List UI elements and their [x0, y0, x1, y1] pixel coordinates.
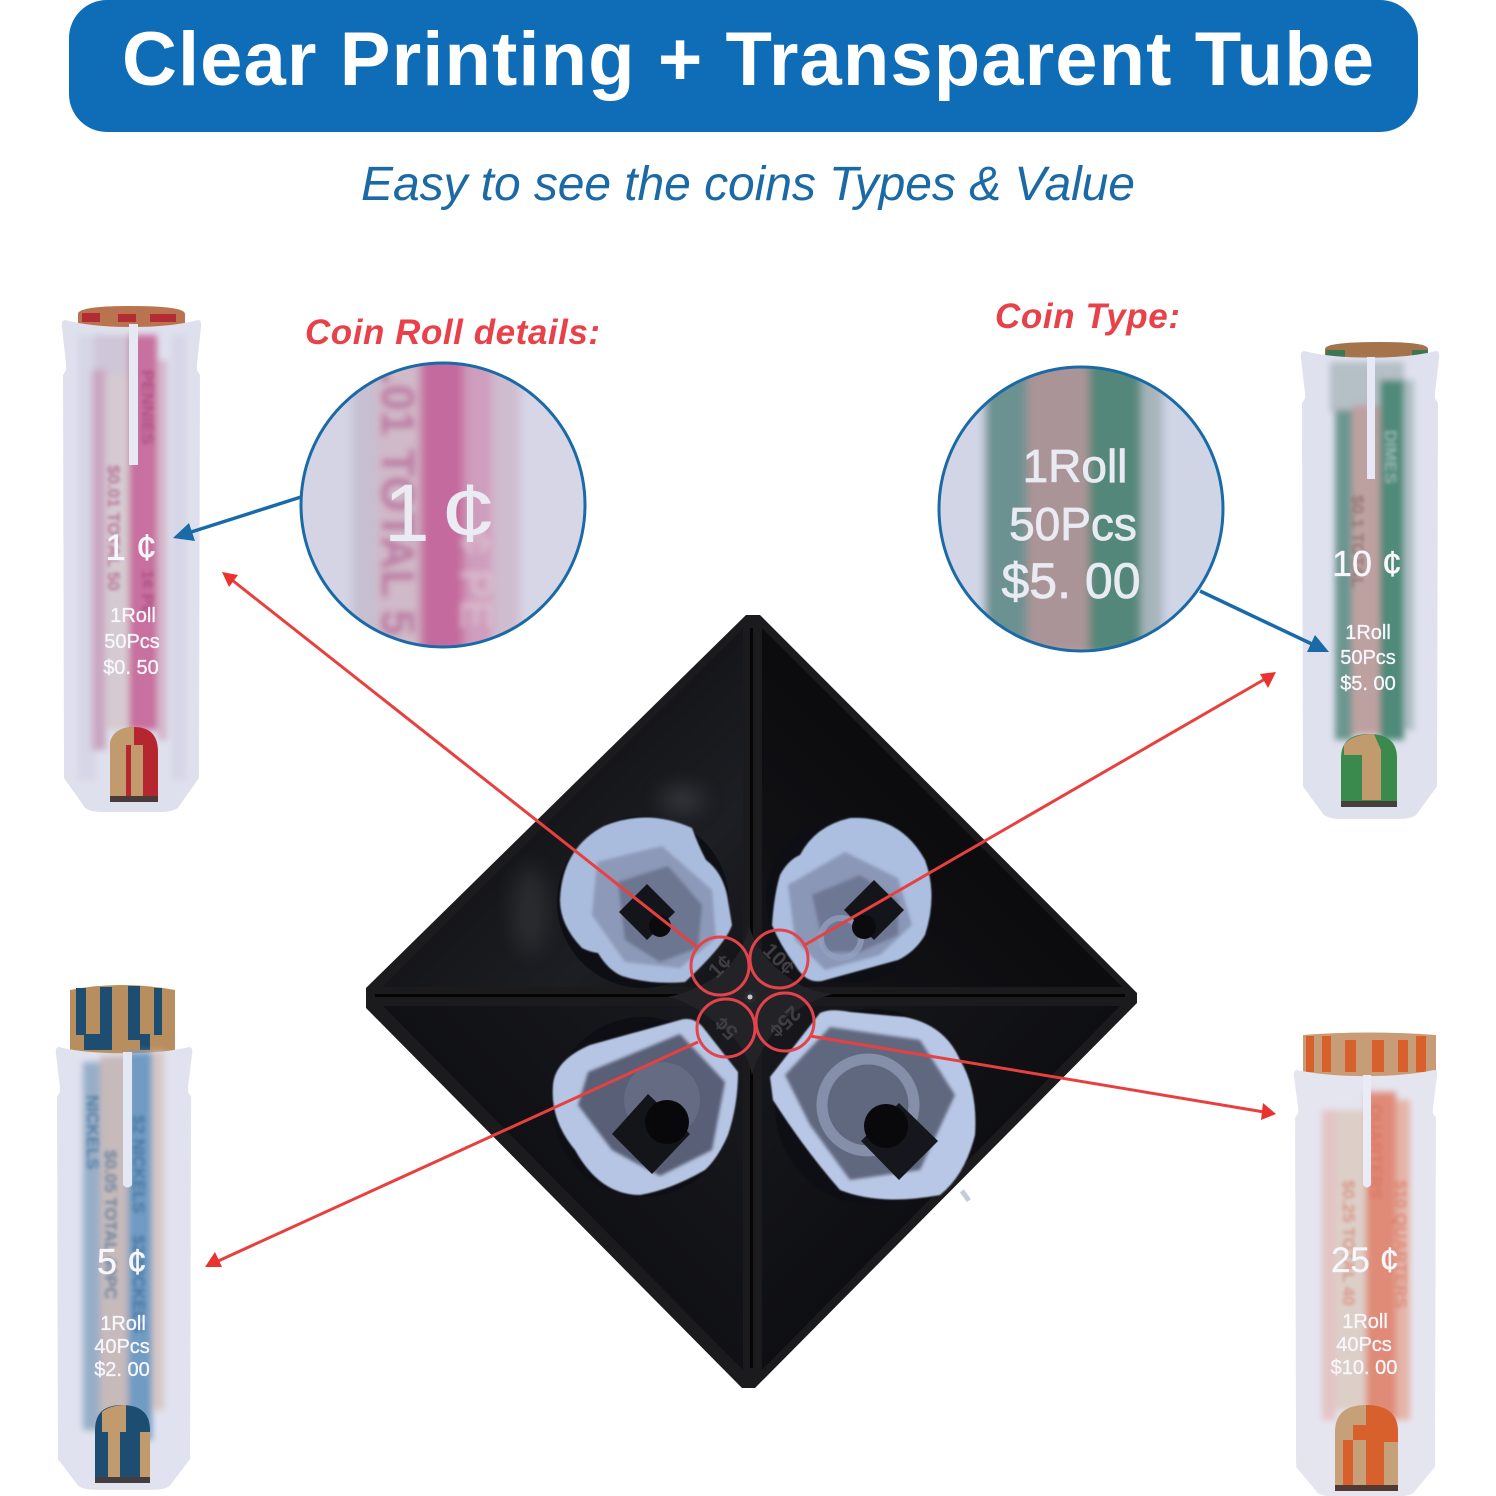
red highlight circles [691, 930, 814, 1057]
tube: 1 cent: 1 ¢ [105, 527, 157, 568]
coin window [1335, 1405, 1398, 1491]
tube: 5 cent: NICKELS [83, 1095, 102, 1170]
tube: 1 cent: PENNIES [138, 370, 157, 445]
tube: 10 cent: $0.1 TOTAL [1348, 495, 1367, 588]
magnifier: roll quantity detail [935, 360, 1227, 655]
tube: 25 cent: QUARTERS [1366, 1104, 1385, 1199]
red arrow: to 1 cent tube [222, 572, 697, 947]
magnifier: 1 cent detail: ¢ [440, 467, 497, 559]
tube: 10 cent: DIMES [1381, 430, 1400, 484]
coin tray [366, 615, 1137, 1388]
magnifier: 1 cent detail [300, 355, 590, 655]
tube: 25 cent [1294, 1032, 1437, 1496]
red arrow: to 10 cent tube [803, 672, 1276, 946]
coin window [110, 727, 158, 802]
tube: 1 cent: $0. 50 [103, 657, 159, 679]
tube: 10 cent: 10 ¢ [1332, 543, 1402, 584]
tube: 5 cent: $2. 00 [94, 1359, 150, 1381]
tray hub: 10¢ [758, 939, 799, 980]
tube: 1 cent: 1¢ PE [138, 570, 157, 616]
magnifier: roll quantity detail: 50Pcs [1009, 498, 1137, 550]
magnifier: 1 cent detail: .01 TOTAL 5 [372, 372, 424, 635]
tube: 5 cent: $0.05 TOTAL 40PC [101, 1150, 120, 1299]
title banner: Clear Printing + Transparent Tube [122, 17, 1374, 102]
tube: 1 cent: 50Pcs [104, 631, 160, 653]
heading: coin type: Coin Type: [995, 297, 1180, 336]
subtitle: Easy to see the coins Types & Value [361, 158, 1135, 211]
tube: 5 cent: $2 NICKELS [129, 1115, 148, 1213]
magnifier: 1 cent detail: ¢ PE [450, 530, 502, 630]
magnifier: roll quantity detail: 1Roll [1023, 440, 1127, 492]
tube: 25 cent: $10 QUARTERS [1391, 1180, 1410, 1308]
tube: 5 cent: 40Pcs [94, 1336, 150, 1358]
cup: top-left [557, 816, 732, 988]
tube: 1 cent: $0.01 TOTAL 50 [104, 465, 123, 591]
tube: 25 cent: 1Roll [1342, 1311, 1388, 1333]
tube: 5 cent [56, 985, 192, 1490]
tube: 10 cent: $5. 00 [1340, 673, 1396, 695]
red arrow: to 5 cent tube [205, 1042, 698, 1267]
tube: 5 cent: 5 ¢ [97, 1241, 147, 1282]
red arrow: to 25 cent tube [810, 1036, 1276, 1120]
heading: coin roll details: Coin Roll details: [305, 313, 600, 352]
tray hub: 1¢ [704, 950, 737, 983]
tube: 1 cent: 1Roll [110, 605, 156, 627]
tube: 5 cent: $2 NICKELS [129, 1235, 148, 1333]
coin window [1341, 734, 1397, 807]
tube: 25 cent: 40Pcs [1336, 1334, 1392, 1356]
tray hub: 25¢ [764, 1001, 805, 1042]
cup: bottom-left [553, 1017, 738, 1197]
tube: 1 cent [62, 306, 201, 812]
title banner [69, 0, 1418, 132]
blue arrow: magnifier to roll label [1200, 591, 1329, 652]
tube: 25 cent: $0.25 TOTAL 40 [1339, 1180, 1358, 1306]
tube: 5 cent: 1Roll [100, 1313, 146, 1335]
tube: 10 cent: 50Pcs [1340, 647, 1396, 669]
tube: 10 cent: 1Roll [1345, 622, 1391, 644]
tube: 10 cent [1301, 342, 1439, 819]
tube: 25 cent: $10. 00 [1331, 1357, 1397, 1379]
tube: 25 cent: 25 ¢ [1331, 1241, 1399, 1280]
tray hub: 5¢ [710, 1011, 743, 1044]
blue arrow: magnifier to 1 cent label [173, 497, 301, 541]
cup: top-right [766, 815, 934, 983]
magnifier: 1 cent detail: 1 [384, 468, 430, 559]
tray body [366, 615, 1137, 1388]
cup: bottom-right [770, 1009, 975, 1205]
tray hub [668, 925, 836, 1075]
magnifier: roll quantity detail: $5. 00 [1001, 553, 1141, 609]
coin window [95, 1405, 150, 1483]
